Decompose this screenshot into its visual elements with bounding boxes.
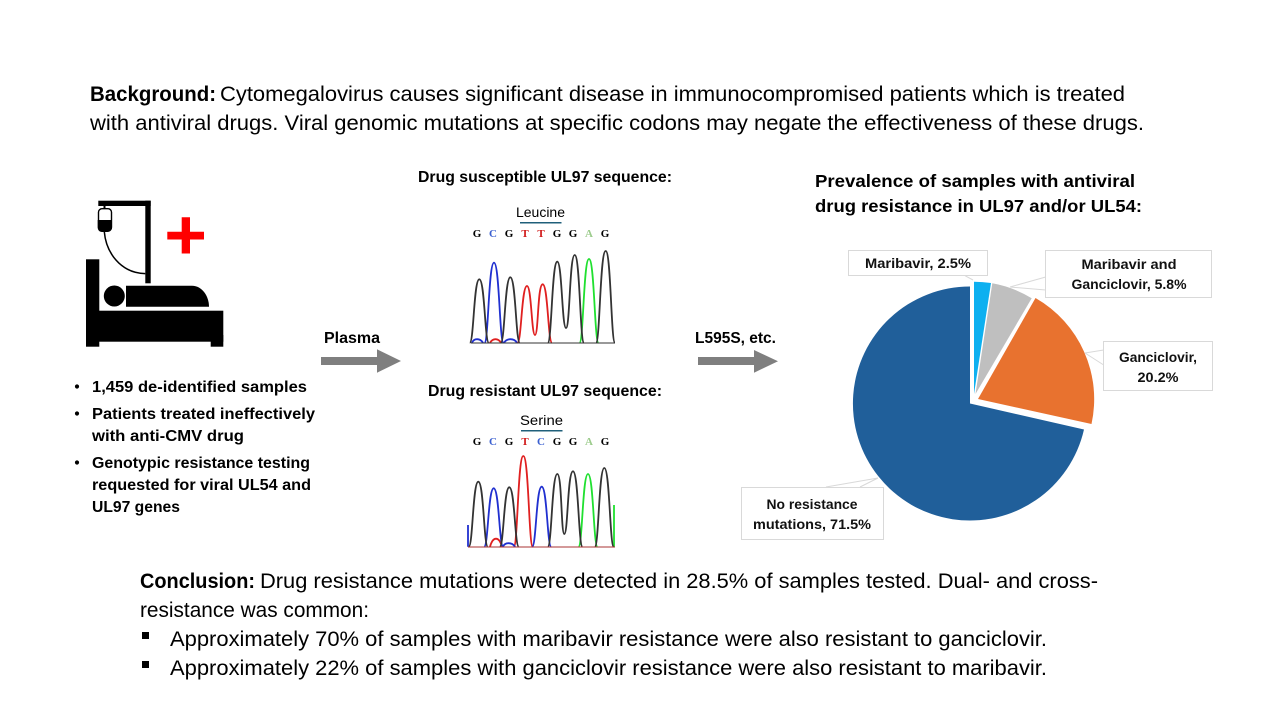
sample bullet list: UL97 genes [92,499,180,516]
chromatogram: drug susceptible: G [473,228,482,240]
sample bullet list: Genotypic resistance testing [92,455,310,472]
slice: no resistance mutations [853,286,1084,520]
pie chart heading: Prevalence of samples with antiviral [815,171,1135,191]
chromatogram: drug susceptible [470,205,615,343]
background text: Background: [90,83,216,106]
background text: with antiviral drugs. Viral genomic mutations at specific codons may negate the effectiveness of these drugs. [89,112,1144,135]
arrow: plasma to sequences [321,349,401,373]
chromatogram: drug resistant: G [553,436,562,448]
callout: no resistance mutations: mutations, 71.5% [753,516,872,532]
conclusion text [140,570,1098,680]
callout: maribavir: Maribavir, 2.5% [865,255,972,271]
chromatogram: drug susceptible: T [537,228,545,240]
plasma label: Plasma [324,330,380,347]
chromatogram: drug susceptible: G [601,228,610,240]
chromatogram: drug resistant: G [601,436,610,448]
callout: maribavir and ganciclovir [1046,250,1212,298]
conclusion text: Approximately 22% of samples with ganciclovir resistance were also resistant to maribavir. [170,657,1047,680]
sample bullet list [75,379,315,516]
mutation label: L595S, etc. [695,330,776,347]
leader lines [826,276,1104,487]
conclusion text: resistance was common: [140,599,369,622]
callout: maribavir [848,250,988,276]
callout: ganciclovir: 20.2% [1138,369,1179,385]
conclusion text: Approximately 70% of samples with maribavir resistance were also resistant to ganciclovir. [170,628,1047,651]
callout: ganciclovir [1104,342,1212,390]
chromatogram: drug susceptible: G [569,228,578,240]
background text [89,83,1144,135]
callout: no resistance mutations [742,488,884,540]
callout: maribavir and ganciclovir: Maribavir and [1082,256,1176,272]
sample bullet list: Patients treated ineffectively [92,406,315,423]
slice: maribavir and ganciclovir [976,283,1032,394]
callout: ganciclovir: Ganciclovir, [1119,349,1197,365]
chromatogram: drug resistant: T [521,436,529,448]
chromatogram: drug resistant: G [473,436,482,448]
chromatogram: drug susceptible: T [521,228,529,240]
chromatogram: drug susceptible: Leucine [516,205,565,220]
pie chart heading [815,171,1142,216]
pie chart: resistance prevalence [853,282,1094,520]
chromatogram: drug resistant: G [505,436,514,448]
chromatogram: drug susceptible: G [553,228,562,240]
callout: maribavir and ganciclovir: Ganciclovir, 5.8% [1072,276,1187,292]
arrow: sequences to prevalence [698,350,778,373]
callout: no resistance mutations: No resistance [766,496,858,512]
chromatogram: drug resistant: C [489,436,497,448]
chromatogram: drug susceptible: A [585,228,593,240]
sample bullet list: requested for viral UL54 and [92,477,311,494]
chromatogram: drug resistant [468,413,615,547]
chromatogram: drug resistant: Serine [520,413,563,428]
heading: drug resistant sequence: Drug resistant UL97 sequence: [428,383,662,400]
sample bullet list: 1,459 de-identified samples [92,379,307,396]
background text: Cytomegalovirus causes significant disease in immunocompromised patients which is treated [220,83,1125,106]
chromatogram: drug susceptible: C [489,228,497,240]
slice: maribavir [974,282,991,394]
slice: ganciclovir [978,298,1094,424]
pie chart heading: drug resistance in UL97 and/or UL54: [815,196,1142,216]
chromatogram: drug resistant: A [585,436,593,448]
conclusion text: Drug resistance mutations were detected in 28.5% of samples tested. Dual- and cross- [260,570,1098,593]
heading: drug susceptible sequence: Drug susceptible UL97 sequence: [418,169,672,186]
sample bullet list: with anti-CMV drug [91,428,244,445]
conclusion text: Conclusion: [140,570,255,593]
icon: hospital bed with IV drip and red cross [86,201,223,347]
chromatogram: drug resistant: G [569,436,578,448]
chromatogram: drug susceptible: G [505,228,514,240]
chromatogram: drug resistant: C [537,436,545,448]
